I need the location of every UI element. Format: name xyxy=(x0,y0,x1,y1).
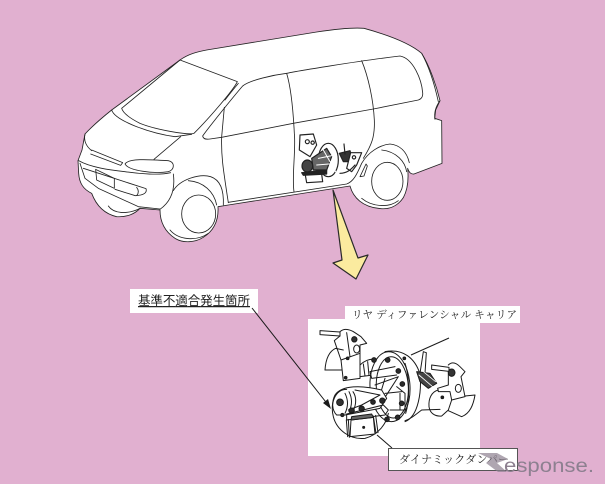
door seams xyxy=(222,107,228,203)
arrow: from van to detail xyxy=(333,190,368,279)
axle tube left xyxy=(360,359,377,377)
leader: carrier xyxy=(411,338,449,355)
right linkage xyxy=(420,352,426,373)
watermark: response logo xyxy=(478,453,594,477)
right mount xyxy=(432,365,449,371)
hood line xyxy=(112,110,192,137)
rear wheel xyxy=(372,162,403,200)
pinion nose xyxy=(333,387,387,415)
detail panel: differential drawing xyxy=(308,319,480,456)
detail circle xyxy=(332,389,388,439)
side windows xyxy=(203,56,423,139)
label: non-conformity location: 基準不適合発生箇所 xyxy=(138,293,250,308)
label: dynamic damper xyxy=(388,448,518,470)
label: rear differential carrier xyxy=(345,306,520,323)
label: dynamic damper: ダイナミックダンパー xyxy=(399,453,509,466)
dynamic damper xyxy=(350,417,375,437)
headlight xyxy=(125,160,173,172)
license plate xyxy=(96,169,114,188)
label: non-conformity location xyxy=(130,289,258,313)
carrier housing behind the cover xyxy=(385,351,420,422)
leader: dynamic damper xyxy=(377,435,392,448)
grille xyxy=(91,150,123,165)
rear arch and lamp xyxy=(382,150,407,172)
front wheel xyxy=(173,176,223,205)
small differential in the van xyxy=(299,134,362,183)
sill xyxy=(228,144,409,202)
leader arrow: non-conformity location xyxy=(252,308,331,409)
watermark: response logo: esponse. xyxy=(504,456,594,477)
label: rear differential carrier: リヤ ディファレンシャル キャリア xyxy=(352,309,517,321)
carrier cover xyxy=(368,351,412,423)
left mount xyxy=(320,331,340,336)
windshield xyxy=(122,60,237,134)
bolts on cover xyxy=(372,357,406,422)
bumper xyxy=(79,161,174,209)
van body silhouette xyxy=(78,28,442,242)
illustration: minivan with highlighted rear differential xyxy=(78,28,442,242)
